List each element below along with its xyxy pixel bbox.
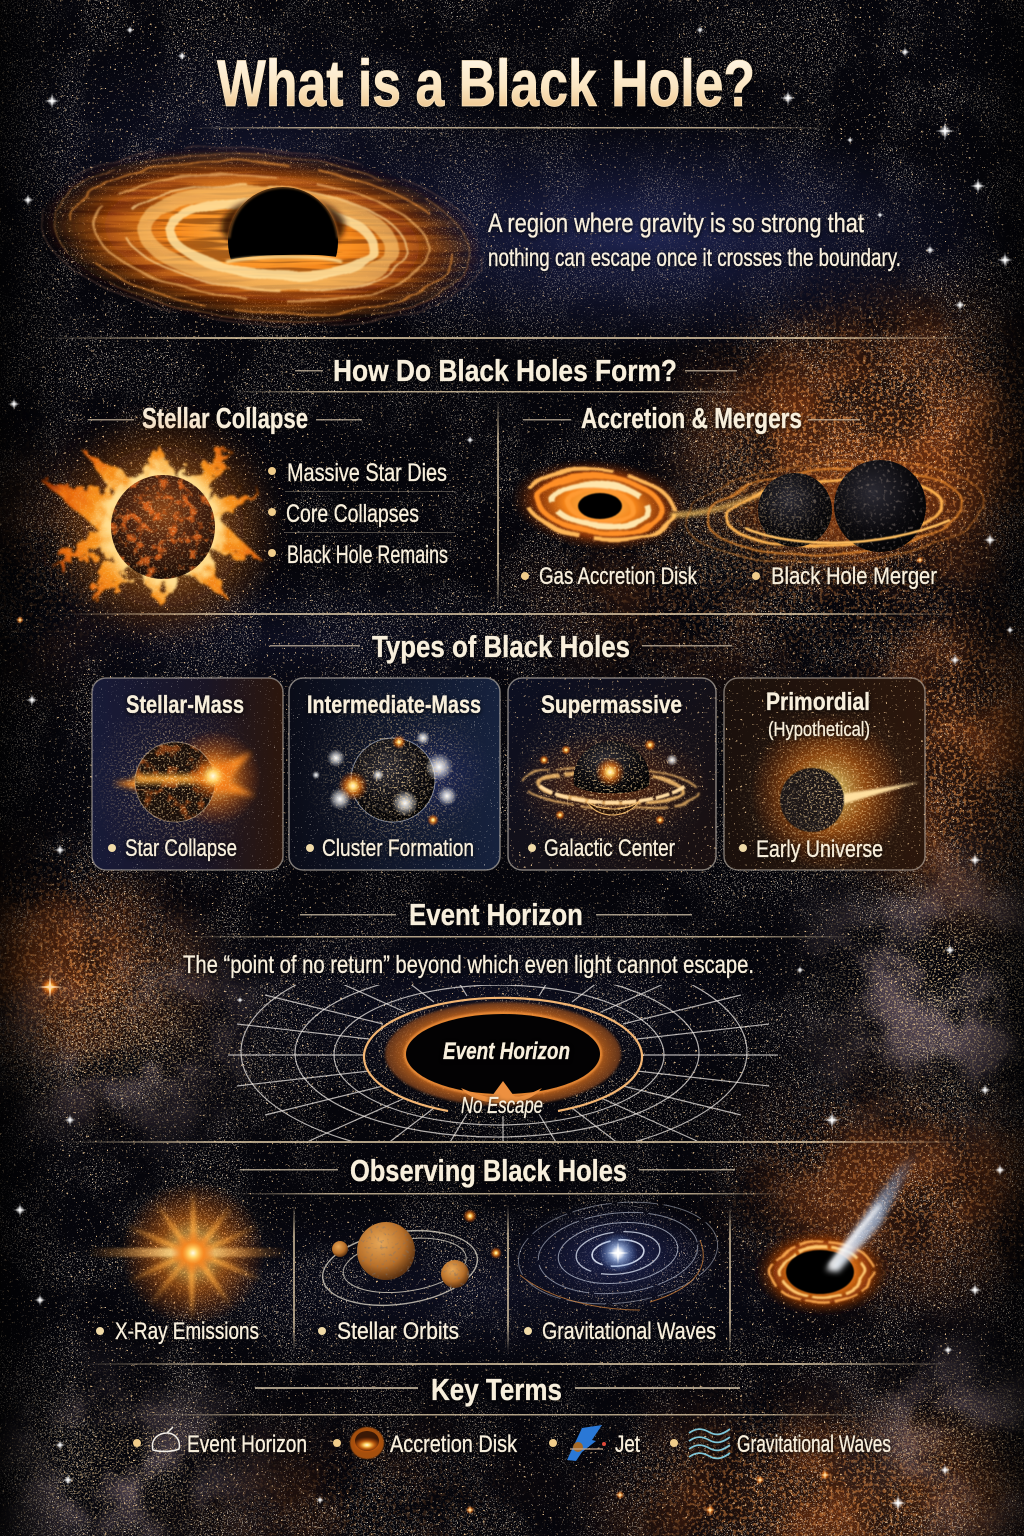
card label: Galactic Center xyxy=(544,835,675,862)
card label: Star Collapse xyxy=(125,835,237,862)
hero description: A region where gravity is so strong that xyxy=(488,208,864,238)
hero black hole illustration xyxy=(40,144,484,329)
icon: blue jet xyxy=(567,1425,606,1461)
icon: wave rings xyxy=(513,1193,723,1313)
card title: Supermassive xyxy=(541,691,682,719)
key term: event horizon: Event Horizon xyxy=(187,1431,307,1458)
bullet list xyxy=(268,459,455,569)
spacetime grid xyxy=(228,938,778,1176)
heading: types of black holes: Types of Black Holes xyxy=(372,629,630,664)
heading: how do black holes form: How Do Black Holes Form? xyxy=(333,353,677,388)
divider xyxy=(60,613,960,615)
card title: Primordial xyxy=(766,688,870,716)
key term: gravitational waves xyxy=(670,1429,891,1458)
hero description: nothing can escape once it crosses the boundary. xyxy=(488,244,901,272)
icon: mini disk xyxy=(350,1427,384,1459)
icon: black hole merger xyxy=(682,452,988,572)
panel: jet from black hole xyxy=(754,1148,922,1316)
card: primordial xyxy=(724,678,925,870)
heading: stellar collapse: Stellar Collapse xyxy=(142,403,308,435)
icon: horizon dome xyxy=(152,1427,179,1451)
key term: gravitational waves: Gravitational Waves xyxy=(737,1431,891,1458)
panel: gravitational waves xyxy=(513,1193,723,1345)
label: gas accretion disk: Gas Accretion Disk xyxy=(539,563,698,590)
panel: stellar collapse xyxy=(40,403,455,645)
heading: accretion and mergers: Accretion & Mergers xyxy=(581,403,802,435)
card title: Stellar-Mass xyxy=(126,691,244,719)
label: event horizon: Event Horizon xyxy=(443,1038,570,1065)
title: What is a Black Hole? xyxy=(217,46,755,120)
icon: stellar-mass hole xyxy=(113,730,261,826)
card title: Intermediate-Mass xyxy=(307,691,481,719)
card: intermediate-mass xyxy=(289,678,500,870)
key term: event horizon xyxy=(133,1427,307,1458)
bullet list: Massive Star Dies xyxy=(287,459,447,487)
event horizon description: The “point of no return” beyond which even light cannot escape. xyxy=(183,951,754,979)
heading: key terms: Key Terms xyxy=(431,1372,562,1407)
panel: stellar orbits xyxy=(318,1209,502,1345)
key term: jet xyxy=(549,1425,640,1461)
label: X-Ray Emissions xyxy=(115,1318,259,1345)
key term: accretion disk xyxy=(333,1427,518,1459)
card label xyxy=(108,835,237,862)
icon: exploding star xyxy=(40,409,281,645)
label: Stellar Orbits xyxy=(337,1318,459,1345)
divider xyxy=(40,337,985,339)
icon: cluster hole xyxy=(312,720,495,830)
icon: supermassive hole xyxy=(513,730,709,840)
divider xyxy=(60,1141,970,1143)
card: stellar-mass xyxy=(92,678,283,870)
card subtitle: (Hypothetical) xyxy=(768,719,870,741)
card label: Early Universe xyxy=(756,836,883,863)
hero description xyxy=(488,208,901,272)
panel: accretion and mergers xyxy=(506,403,988,590)
panel: x-ray emissions xyxy=(88,1181,286,1345)
no escape arrow xyxy=(461,1081,542,1103)
icon: waves xyxy=(689,1429,730,1458)
icon: primordial hole xyxy=(750,714,920,870)
icon: orbiting planets xyxy=(318,1209,502,1315)
label: Gravitational Waves xyxy=(542,1318,716,1345)
icon: x-ray burst xyxy=(88,1181,286,1325)
icon: gas accretion disk xyxy=(506,450,770,560)
card: supermassive xyxy=(508,678,716,870)
bullet list: Black Hole Remains xyxy=(287,541,448,569)
key term: accretion disk: Accretion Disk xyxy=(390,1431,518,1458)
event horizon diagram xyxy=(228,938,778,1176)
title underline xyxy=(190,127,830,128)
label: black hole merger: Black Hole Merger xyxy=(771,563,937,590)
divider xyxy=(80,1363,960,1365)
heading: event horizon: Event Horizon xyxy=(409,897,583,932)
bullet list: Core Collapses xyxy=(286,500,419,528)
heading: observing black holes: Observing Black Holes xyxy=(350,1153,627,1188)
card label: Cluster Formation xyxy=(322,835,474,862)
label: no escape: No Escape xyxy=(461,1092,543,1118)
key term: jet: Jet xyxy=(615,1431,640,1458)
